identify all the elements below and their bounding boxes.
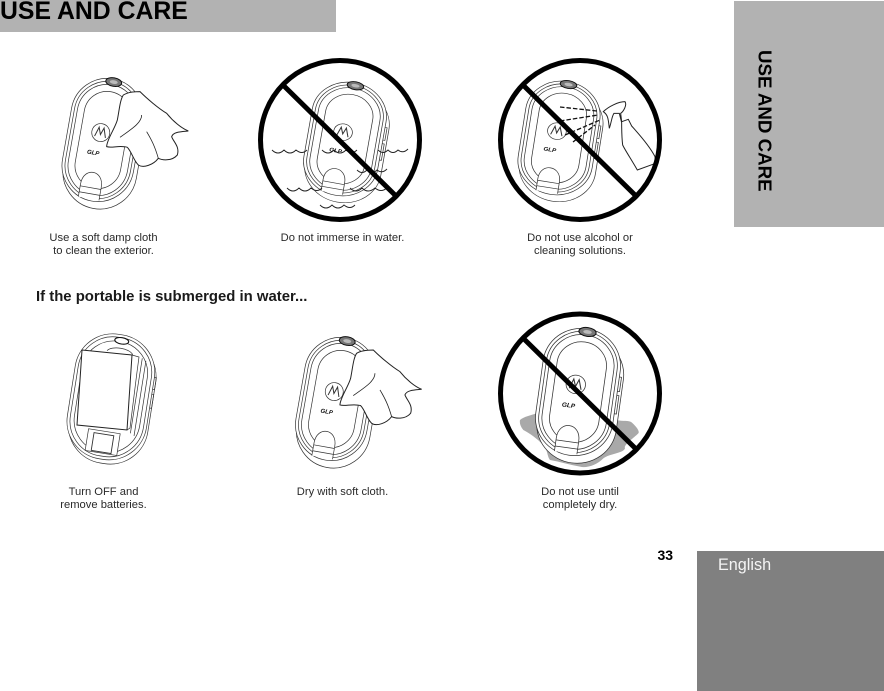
icon: device with cloth [55,71,188,215]
caption: damp cloth: Use a soft damp cloth [49,232,158,244]
icon: device in puddle with prohibition sign [500,314,660,473]
caption: until dry: Do not use until [541,486,619,498]
language tab [697,551,884,691]
caption: alcohol: cleaning solutions. [534,245,626,257]
panel: no alcohol or cleaners [500,60,660,257]
panel: do not use until dry [500,314,660,511]
header band [0,0,336,32]
panel: do not immerse [260,60,420,244]
subheading: If the portable is submerged in water... [36,289,307,305]
caption: dry: Dry with soft cloth. [297,486,388,498]
icon: device in water with prohibition sign [260,60,420,220]
caption: immerse: Do not immerse in water. [281,232,404,244]
caption: batteries: Turn OFF and [69,486,138,498]
caption: batteries: remove batteries. [60,499,147,511]
side tab: section name [734,1,884,227]
caption: alcohol: Do not use alcohol or [527,232,633,244]
caption: until dry: completely dry. [543,499,617,511]
caption: damp cloth: to clean the exterior. [53,245,154,257]
panel: remove batteries [60,328,162,511]
page number: 33 [658,547,673,563]
icon: device back with battery [61,328,162,470]
side tab: section name: USE AND CARE [754,50,776,192]
icon: device and spray bottle with prohibition sign [500,60,660,220]
icon: device with cloth [289,330,422,474]
language tab: English [718,556,771,574]
panel: dry with cloth [289,330,422,498]
panel: wipe with damp cloth [49,71,188,257]
